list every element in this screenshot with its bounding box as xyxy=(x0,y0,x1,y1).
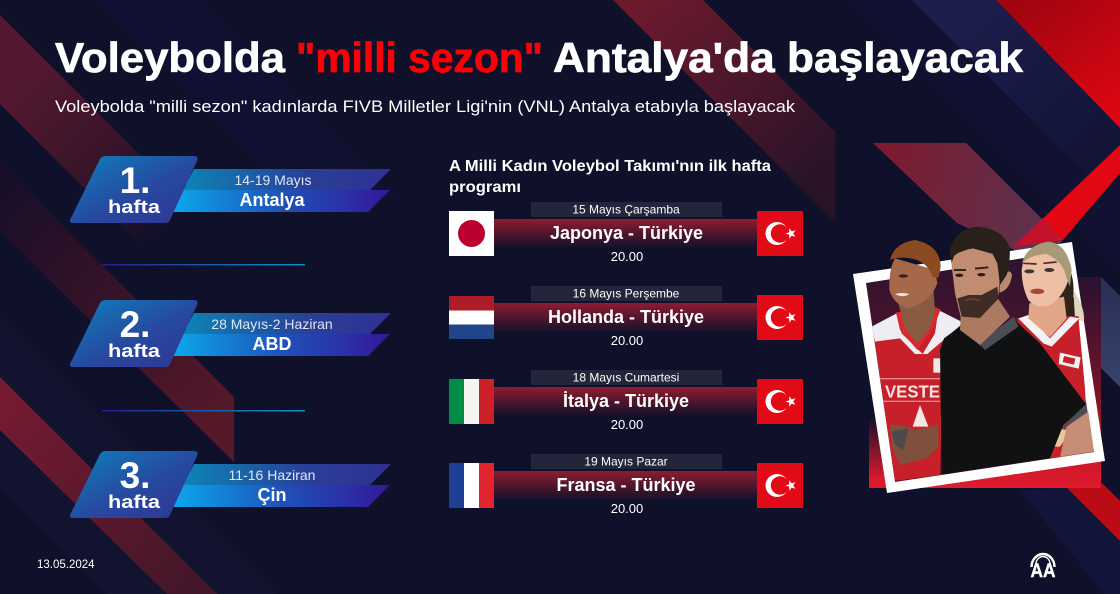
week 3 panel: Çin xyxy=(258,485,286,505)
match: İtalya - Türkiye: İtalya - Türkiye xyxy=(563,391,689,411)
AA logo: AA xyxy=(1030,561,1056,582)
week 1 panel: 1. xyxy=(120,160,150,201)
week 3 panel xyxy=(70,451,391,518)
week 2 panel: hafta xyxy=(108,341,161,361)
title: Antalya'da başlayacak xyxy=(553,34,1024,81)
flag: France xyxy=(449,463,494,508)
match: Hollanda - Türkiye: Hollanda - Türkiye xyxy=(548,307,704,327)
date: 13.05.2024 xyxy=(37,559,95,571)
schedule heading: programı xyxy=(449,179,521,196)
schedule heading: A Milli Kadın Voleybol Takımı'nın ilk hafta xyxy=(449,158,771,175)
flag: Japan xyxy=(449,211,494,256)
match: İtalya - Türkiye xyxy=(449,370,803,432)
week 1 panel: Antalya xyxy=(239,190,305,210)
week 3 panel: hafta xyxy=(108,492,161,512)
match: Japonya - Türkiye: Japonya - Türkiye xyxy=(550,223,703,243)
match: Hollanda - Türkiye: 16 Mayıs Perşembe xyxy=(573,286,680,300)
week 1 panel: 14-19 Mayıs xyxy=(234,172,312,188)
title: Voleybolda xyxy=(55,34,286,81)
divider 1 xyxy=(102,264,305,265)
match: Fransa - Türkiye: 20.00 xyxy=(611,501,643,516)
week 2 panel xyxy=(70,300,391,367)
match: İtalya - Türkiye: 20.00 xyxy=(611,417,643,432)
match: Japonya - Türkiye: 20.00 xyxy=(611,249,643,264)
match: İtalya - Türkiye: 18 Mayıs Cumartesi xyxy=(573,370,679,384)
week 2 panel: 2. xyxy=(120,304,150,345)
flag: Turkey xyxy=(757,463,803,508)
week 1 panel xyxy=(70,156,391,223)
left player xyxy=(872,240,963,481)
photo collage xyxy=(853,143,1120,493)
flag: Italy xyxy=(449,379,494,424)
match: Fransa - Türkiye: 19 Mayıs Pazar xyxy=(584,454,668,468)
match: Fransa - Türkiye: Fransa - Türkiye xyxy=(556,475,696,495)
match: Fransa - Türkiye xyxy=(449,454,803,516)
match: Japonya - Türkiye xyxy=(449,202,803,264)
subtitle: Voleybolda "milli sezon" kadınlarda FIVB Milletler Ligi'nin (VNL) Antalya etabıyla başlayacak xyxy=(55,97,796,116)
title xyxy=(55,34,1024,81)
schedule heading xyxy=(449,158,771,196)
flag: Netherlands xyxy=(449,296,494,339)
week 1 panel: hafta xyxy=(108,197,161,217)
match: Hollanda - Türkiye xyxy=(449,286,803,348)
coach xyxy=(940,227,1094,475)
flag: Turkey xyxy=(757,295,803,340)
left player: VESTE xyxy=(885,381,940,401)
flag: Turkey xyxy=(757,379,803,424)
flag: Turkey xyxy=(757,211,803,256)
match: Japonya - Türkiye: 15 Mayıs Çarşamba xyxy=(572,202,680,216)
match: Hollanda - Türkiye: 20.00 xyxy=(611,333,643,348)
title: "milli sezon" xyxy=(296,34,543,81)
week 2 panel: 28 Mayıs-2 Haziran xyxy=(211,316,333,332)
players and coach xyxy=(872,227,1094,481)
week 3 panel: 3. xyxy=(120,455,150,496)
divider 2 xyxy=(102,410,305,411)
week 3 panel: 11-16 Haziran xyxy=(229,467,315,483)
week 2 panel: ABD xyxy=(252,334,292,354)
right player xyxy=(1017,242,1088,463)
